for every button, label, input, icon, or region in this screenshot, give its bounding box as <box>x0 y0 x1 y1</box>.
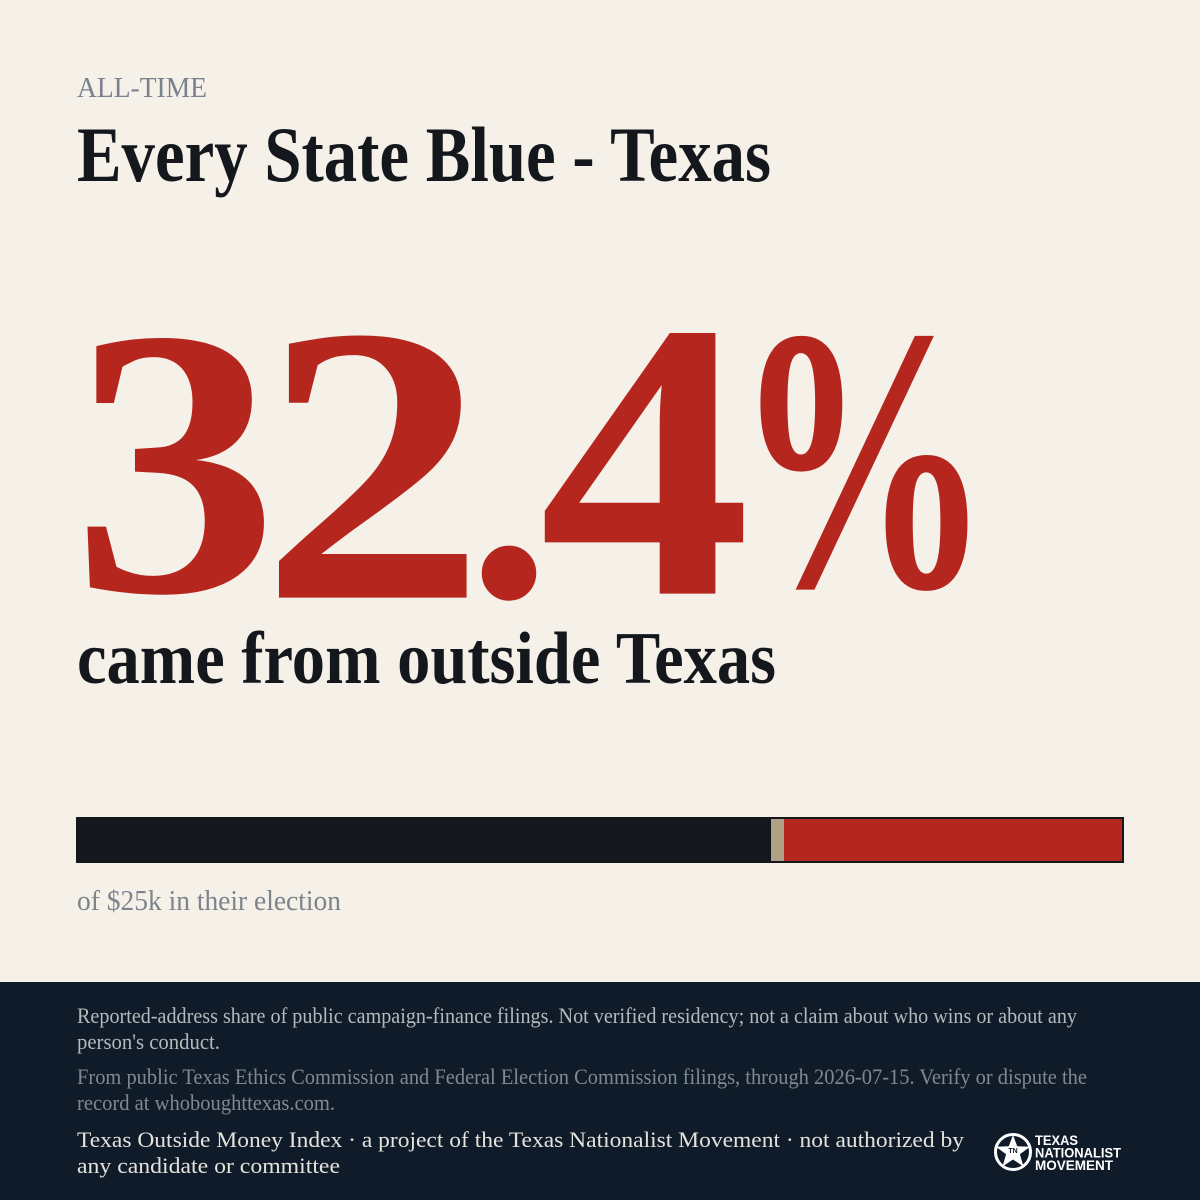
hero figure: 32.4%: 4 <box>539 241 751 680</box>
logo: Texas Nationalist Movement: TEXAS <box>1035 1133 1078 1148</box>
hero figure: 32.4%: . <box>467 293 551 670</box>
hero figure: 32.4%: % <box>734 251 992 668</box>
hero figure: 32.4%: 3 <box>72 251 278 674</box>
logo: Texas Nationalist Movement: NATIONALIST <box>1035 1146 1122 1160</box>
disclaimer text: person's conduct. <box>77 1029 220 1054</box>
source text: record at whoboughttexas.com. <box>77 1090 335 1115</box>
source text <box>77 1064 1087 1115</box>
source text: From public Texas Ethics Commission and Federal Election Commission filings, through 2026-07-15. Verify or dispute the <box>77 1064 1087 1089</box>
footer panel <box>0 982 1200 1200</box>
bar caption: of $25k in their election <box>77 885 341 917</box>
logo: Texas Nationalist Movement: TN <box>1008 1148 1018 1155</box>
disclaimer text: Reported-address share of public campaign-finance filings. Not verified residency; not a claim about who wins or about any <box>77 1003 1078 1028</box>
logo: Texas Nationalist Movement: MOVEMENT <box>1035 1158 1114 1173</box>
title: Every State Blue - Texas <box>77 111 771 198</box>
attribution text: Texas Outside Money Index · a project of the Texas Nationalist Movement · not authorized by <box>77 1127 965 1152</box>
logo: Texas Nationalist Movement <box>996 1133 1122 1173</box>
eyebrow label: ALL-TIME <box>77 72 207 104</box>
stacked share bar <box>76 817 1124 863</box>
attribution text <box>77 1127 965 1178</box>
attribution text: any candidate or committee <box>77 1153 340 1178</box>
subheading: came from outside Texas <box>77 618 776 700</box>
disclaimer text <box>77 1003 1078 1054</box>
hero figure: 32.4%: 2 <box>260 245 486 684</box>
